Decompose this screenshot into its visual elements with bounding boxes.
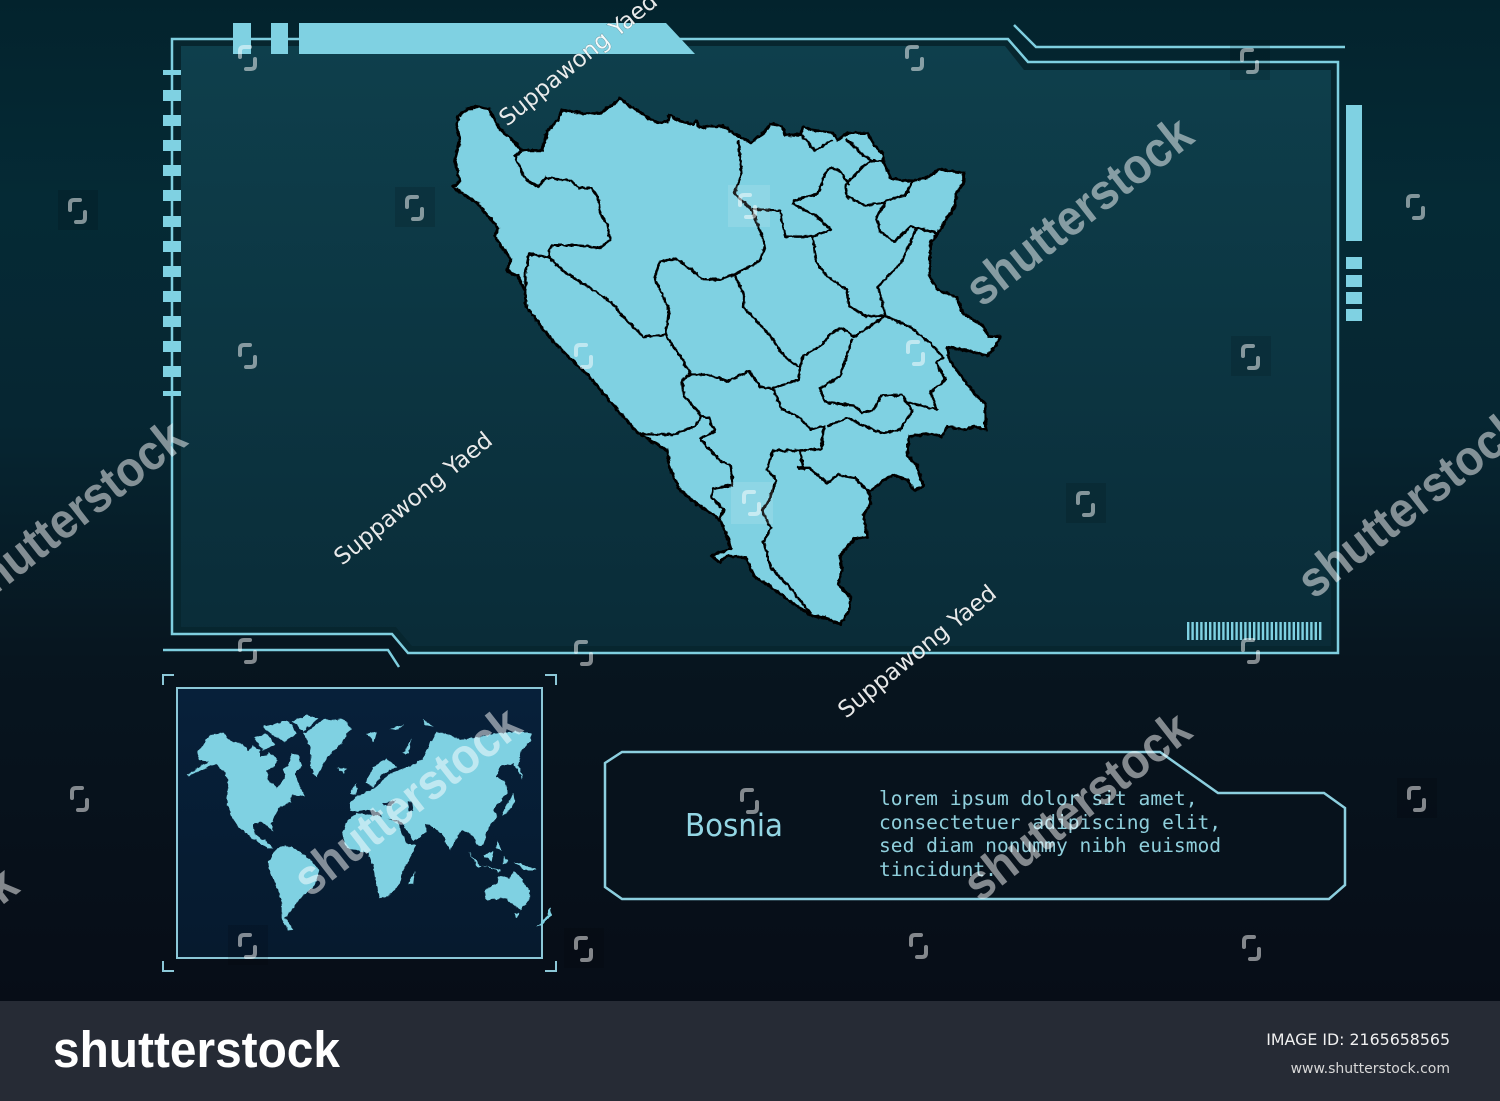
description text: tincidunt. bbox=[879, 858, 997, 881]
world map continents bbox=[187, 715, 552, 930]
watermark: shutterstock repeats: shutterstock bbox=[952, 700, 1201, 912]
footer logo: shutterstock bbox=[53, 1021, 341, 1078]
top bar tabs bbox=[233, 23, 695, 54]
frame accent line: top right bbox=[1014, 25, 1345, 47]
panel: main HUD frame bbox=[172, 39, 1338, 653]
watermark: author name repeats: Suppawong Yaed bbox=[833, 580, 1002, 724]
frame accent line: bottom left bbox=[163, 650, 399, 667]
right side bars bbox=[1346, 105, 1362, 321]
map: Bosnia regions bbox=[453, 99, 1000, 624]
watermark: author name repeats: Suppawong Yaed bbox=[329, 427, 498, 571]
left tick ladder bbox=[163, 70, 181, 396]
watermark: shutterstock repeats: shutterstock bbox=[282, 695, 531, 907]
description text: lorem ipsum dolor sit amet, bbox=[879, 787, 1198, 810]
description text bbox=[879, 787, 1221, 881]
watermark icons bbox=[58, 40, 1437, 968]
watermark: shutterstock repeats: shutterstock bbox=[954, 105, 1203, 317]
footer bar bbox=[0, 1001, 1500, 1101]
footer url: www.shutterstock.com bbox=[1291, 1061, 1450, 1077]
description text: consectetuer adipiscing elit, bbox=[879, 811, 1221, 834]
barcode tick strip bbox=[1187, 622, 1322, 640]
heading: Bosnia: Bosnia bbox=[685, 808, 783, 844]
panel: world map inset bbox=[177, 688, 542, 958]
footer image id: IMAGE ID: 2165658565 bbox=[1266, 1030, 1450, 1049]
description text: sed diam nonummy nibh euismod bbox=[879, 834, 1221, 857]
inset corner brackets bbox=[163, 675, 556, 971]
watermark: author name repeats bbox=[329, 0, 1002, 724]
panel: info box bbox=[605, 752, 1345, 899]
